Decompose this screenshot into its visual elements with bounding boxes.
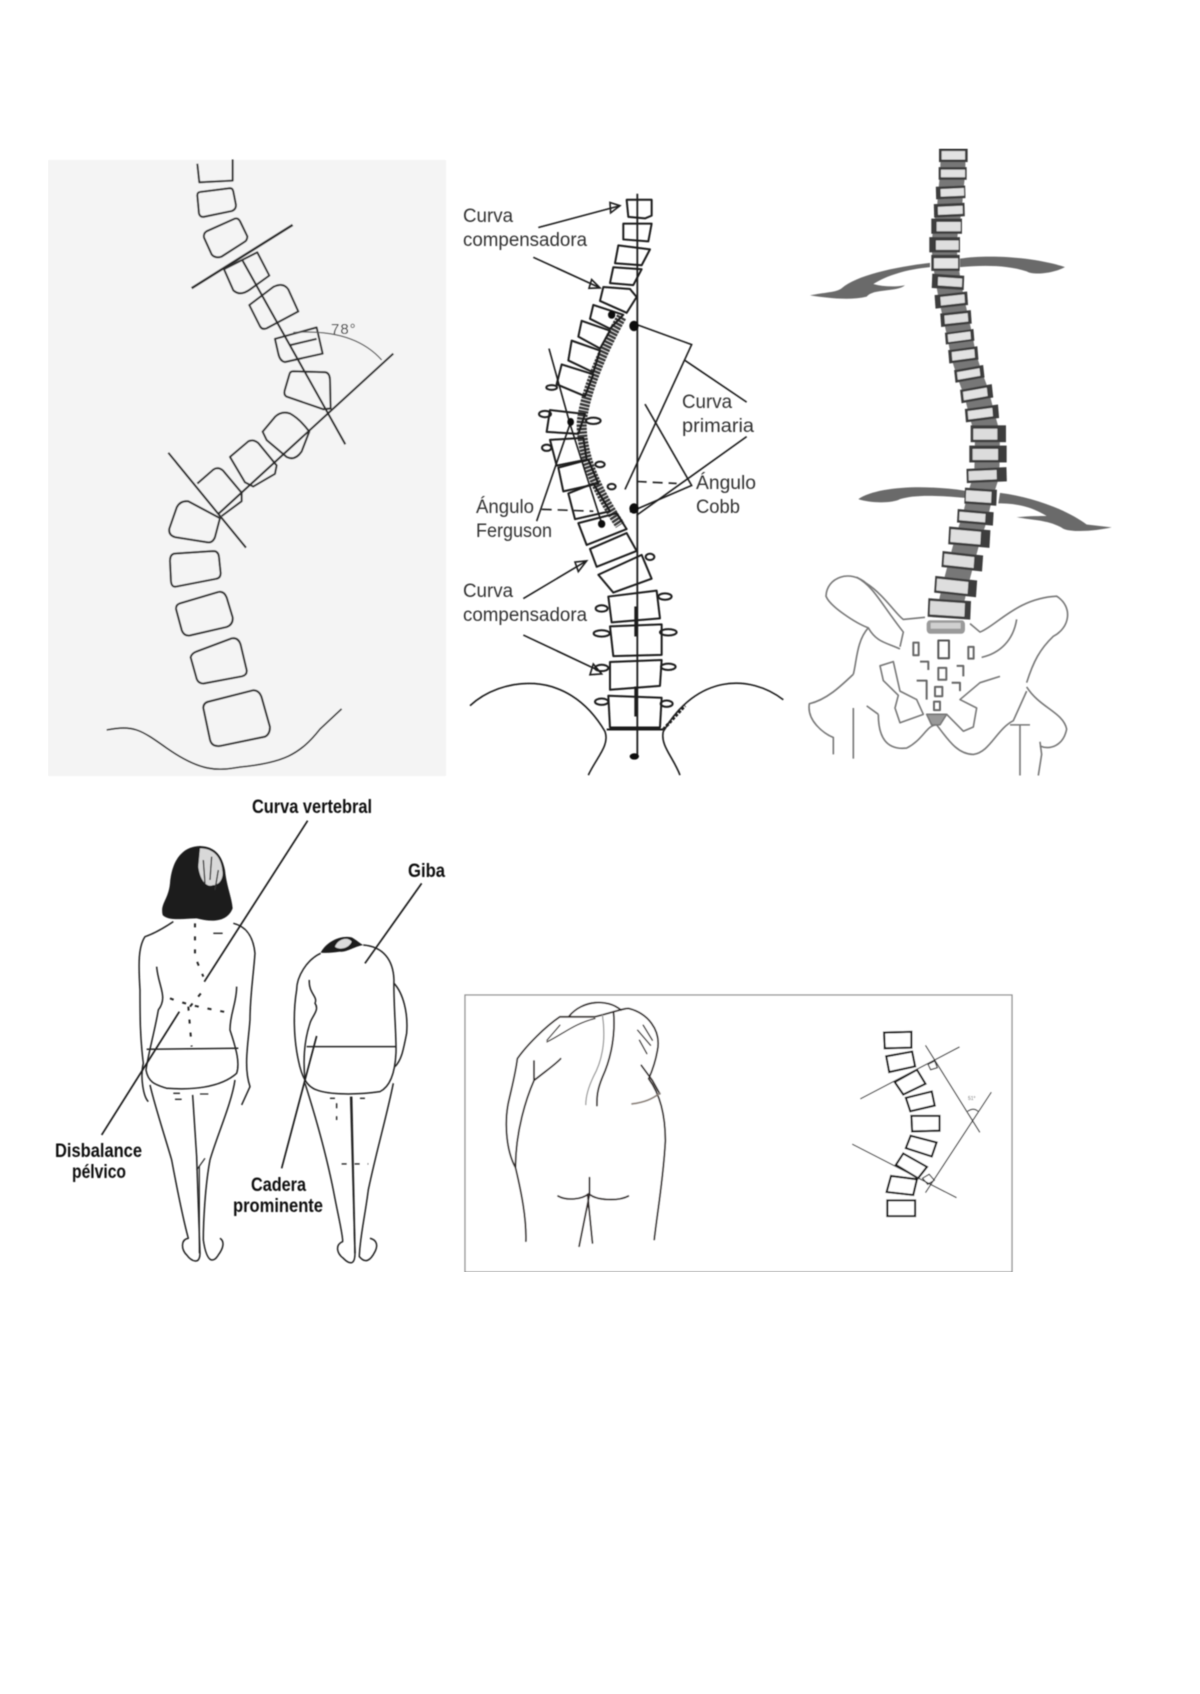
labels: primaria [682,416,754,437]
labels: Curva [682,392,732,413]
figure: standing woman [139,846,255,1261]
labels: Ángulo [476,497,534,518]
labels: Ángulo [696,473,756,494]
panel: Cobb angle 78 degrees spine diagram [48,160,446,776]
panel: primary and compensatory curves diagram [463,194,783,775]
anchor dots [567,311,639,760]
labels: Disbalance [55,1141,142,1162]
small angle label: 51° [968,1096,976,1102]
spine drawing [470,200,783,775]
pelvis [809,576,1068,776]
small Cobb diagram [884,1032,940,1216]
labels: Cobb [696,497,740,518]
panel: framed forward-bend back and Cobb sketch [465,995,1012,1272]
labels [463,206,756,626]
vertebral column [927,149,1007,634]
labels: Curva [463,581,513,602]
leader lines [102,821,422,1168]
angle label: 78° [331,321,357,338]
measurement lines and arrows [523,194,747,757]
labels: Curva [463,206,513,227]
Cobb measurement lines [168,225,393,548]
vertebrae outlines [107,160,382,769]
labels: compensadora [463,605,587,626]
labels: Giba [408,861,445,882]
labels: compensadora [463,230,587,251]
panel: spine with pelvis and rotation arrows [809,149,1112,776]
labels [55,797,445,1217]
labels: Cadera [251,1175,306,1196]
labels: pélvico [72,1162,126,1183]
labels: Curva vertebral [252,797,372,818]
back sketch [506,1002,665,1246]
figure: bending forward showing hump [294,937,407,1263]
rotation arrows [810,257,1112,531]
labels: prominente [233,1196,323,1217]
panel: back view figures with labels [55,797,445,1263]
labels: Ferguson [476,521,552,542]
Cobb lines [852,1045,991,1198]
